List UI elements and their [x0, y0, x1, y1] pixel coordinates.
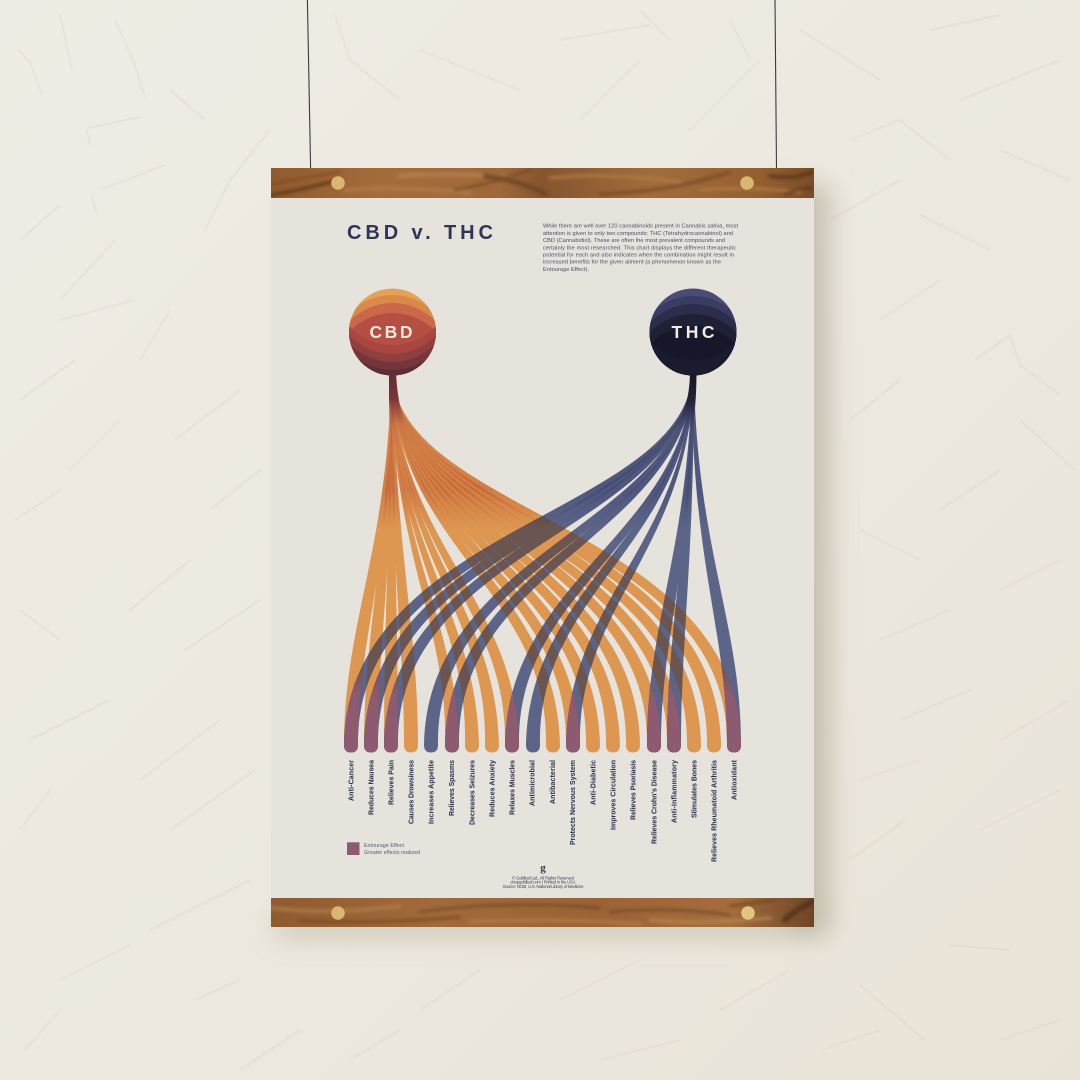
THC circle [650, 288, 736, 376]
entourage overlap stems (mauve) [344, 668, 741, 752]
CBD circle [349, 288, 436, 376]
condition labels: Anti-Cancer [348, 760, 356, 801]
poster paper [271, 198, 814, 898]
intro paragraph [543, 224, 738, 273]
condition labels: Reduces Anxiety [490, 760, 496, 817]
condition labels: Protects Nervous System [570, 760, 577, 845]
navy shading where THC ribbons bundle [344, 376, 741, 752]
top wooden bar [271, 168, 814, 198]
intro paragraph: While there are well over 120 cannabinoids present in Cannabis sativa, most [543, 224, 738, 230]
right hanging wire [775, 0, 776, 168]
intro paragraph: increased benefits for the given ailment (a phenomenon known as the [543, 260, 721, 266]
condition labels: Increases Appetite [429, 760, 436, 824]
condition labels: Antioxidant [732, 759, 739, 800]
overlap of THC over CBD ribbons (brown) [344, 516, 741, 752]
condition labels: Relieves Rheumatoid Arthritis [712, 760, 718, 862]
intro paragraph: certainly the most researched. This chart displays the different therapeutic [543, 245, 736, 251]
legend swatch [347, 842, 360, 855]
condition labels: Relieves Spasms [449, 760, 456, 816]
pin: bottom right [741, 906, 755, 920]
chart: ribbons from CBD and THC to the 20 conditions [344, 370, 741, 752]
condition labels: Reduces Nausea [368, 760, 376, 815]
bottom wooden bar [271, 898, 814, 927]
CBD stem [389, 370, 405, 425]
legend text: Greater effects realized [364, 850, 420, 856]
condition labels: Relaxes Muscles [510, 760, 516, 815]
left hanging wire [307, 0, 311, 168]
condition labels: Decreases Seizures [469, 760, 476, 825]
footer credits: shopgoldleaf.com | Printed in the USA [510, 880, 576, 885]
CBD circle label: CBD [370, 322, 412, 342]
condition labels: Antibacterial [550, 760, 557, 804]
condition labels: Anti-Inflammatory [672, 760, 678, 823]
condition labels: Antimicrobial [530, 760, 537, 806]
intro paragraph: CBD (Cannabidiol). These are often the most prevalent compounds and [543, 238, 725, 244]
red shading where CBD ribbons bundle [344, 376, 741, 752]
footer credits [502, 875, 584, 889]
title: CBD v. THC [347, 222, 493, 244]
condition labels: Causes Drowsiness [408, 760, 416, 824]
condition labels: Stimulates Bones [691, 760, 698, 818]
pin: top left [331, 176, 345, 190]
footer credits: © Goldleaf Ltd., All Rights Reserved [512, 875, 575, 880]
poster drop shadow [275, 185, 830, 937]
pin: top right [740, 176, 754, 190]
legend [347, 842, 420, 856]
legend text [364, 843, 420, 856]
condition labels: Improves Circulation [610, 760, 618, 830]
condition labels: Relieves Crohn's Disease [652, 760, 658, 844]
intro paragraph: Entourage Effect). [543, 267, 589, 273]
intro paragraph: attention is given to only two compounds: THC (Tetrahydrocannabinol) and [543, 231, 733, 237]
footer credits: Source: NCBI, U.S. National Library of Medicine [502, 884, 584, 889]
condition labels [348, 759, 739, 862]
condition labels: Relieves Pain [388, 760, 396, 805]
CBD ribbons (orange) [344, 376, 741, 752]
footer logo: g [540, 862, 546, 874]
pin: bottom left [331, 906, 345, 920]
condition labels: Relieves Psoriasis [630, 760, 638, 820]
THC stem [675, 370, 696, 430]
intro paragraph: potential for each and also indicates when the combination might result in [543, 252, 734, 258]
THC circle label: THC [672, 322, 715, 342]
condition labels: Anti-Diabetic [590, 760, 597, 805]
THC ribbons (blue) [344, 376, 741, 752]
legend text: Entourage Effect [364, 843, 405, 849]
